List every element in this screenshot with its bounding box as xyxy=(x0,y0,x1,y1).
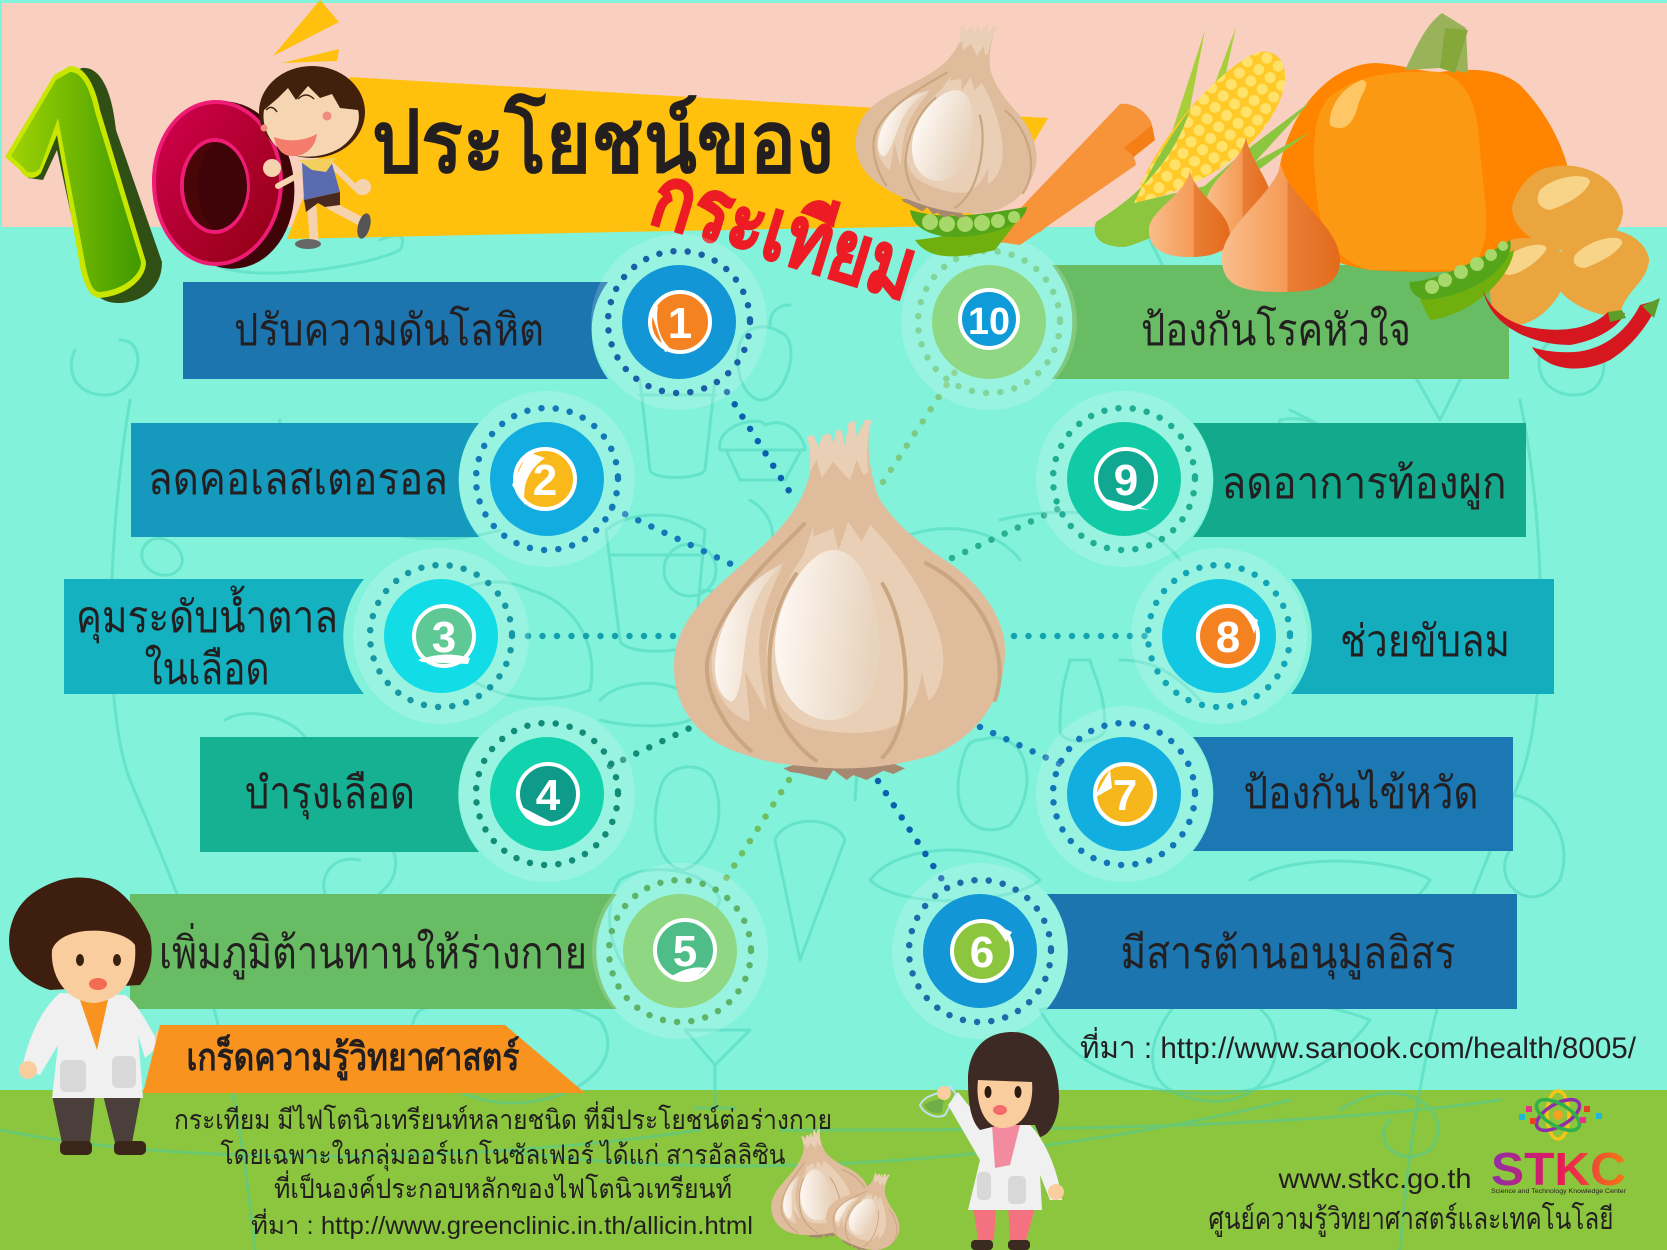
item 9 xyxy=(1036,391,1526,567)
female scientist xyxy=(920,1032,1064,1250)
item 5 xyxy=(130,863,768,1039)
website: www.stkc.go.th xyxy=(1277,1163,1472,1194)
banner: มีสารต้านอนุมูลอิสระ xyxy=(1047,894,1517,1009)
line 3: ที่เป็นองค์ประกอบหลักของไฟโตนิวเทรียนท์ xyxy=(274,1170,732,1204)
label: มีสารต้านอนุมูลอิสร xyxy=(1120,929,1456,980)
badge 9 xyxy=(1036,391,1212,567)
label: เพิ่มภูมิต้านทานให้ร่างกาย xyxy=(159,922,587,980)
male scientist xyxy=(9,877,175,1155)
label: ปรับความดันโลหิต xyxy=(234,305,544,355)
badge 4 xyxy=(459,706,635,882)
heading: เกร็ดความรู้วิทยาศาสตร์: เกร็ดความรู้วิทยาศาสตร์ xyxy=(186,1034,520,1081)
banner: ลดอาการท้องผูก xyxy=(1193,423,1526,537)
badge 10: 10 xyxy=(968,301,1010,343)
badge 7 xyxy=(1036,706,1212,882)
carrots xyxy=(985,104,1155,245)
label: บำรุงเลือด xyxy=(245,769,415,820)
badge 3 xyxy=(353,548,529,724)
central garlic xyxy=(674,420,1005,780)
item 8 xyxy=(1131,548,1554,724)
pumpkin xyxy=(1277,13,1571,272)
label line 2: ในเลือด xyxy=(144,644,270,694)
badge 3: 3 xyxy=(432,613,456,662)
small garlic pair xyxy=(761,1124,918,1250)
badge 6 xyxy=(892,863,1068,1039)
body text xyxy=(174,1101,832,1204)
banner: ลดคอเลสเตอรอล xyxy=(131,423,479,537)
item 6 xyxy=(892,863,1517,1039)
item 10 xyxy=(901,234,1509,410)
source: sanook: ที่มา : http://www.sanook.com/health/8005/ xyxy=(1080,1027,1637,1065)
corn xyxy=(1095,27,1310,247)
label: คุมระดับน้ำตาล xyxy=(76,585,338,644)
cartoon boy xyxy=(259,66,373,249)
potatoes xyxy=(1490,166,1649,325)
item 3 xyxy=(64,548,529,724)
source: greenclinic: ที่มา : http://www.greenclinic.in.th/allicin.html xyxy=(251,1208,753,1240)
heading: ประโยชน์ของ: ประโยชน์ของ xyxy=(372,92,834,191)
badge 6: 6 xyxy=(970,928,994,977)
label: ลดอาการท้องผูก xyxy=(1222,459,1506,510)
label: ป้องกันไข้หวัด xyxy=(1244,768,1478,818)
tagline: Science and Technology Knowledge Center xyxy=(1491,1189,1626,1195)
badge 7: 7 xyxy=(1113,771,1137,820)
item 2 xyxy=(131,391,635,567)
badge 10 xyxy=(901,234,1077,410)
wordmark: STKC xyxy=(1491,1143,1626,1195)
food doodle pattern xyxy=(0,236,1604,1250)
banner: คุมระดับน้ำตาล ในเลือด xyxy=(64,579,364,694)
banner: ช่วยขับลม xyxy=(1291,579,1554,694)
background: green footer xyxy=(0,1090,1667,1250)
line 1: กระเทียม มีไฟโตนิวเทรียนท์หลายชนิด ที่มีประโยชน์ต่อร่างกาย xyxy=(174,1101,832,1135)
badge 8 xyxy=(1131,548,1307,724)
orange label ribbon xyxy=(143,1025,585,1093)
item 4 xyxy=(200,706,635,882)
banner: ป้องกันไข้หวัด xyxy=(1193,737,1513,851)
background: peach header xyxy=(2,3,1667,227)
badge 2: 2 xyxy=(533,456,557,505)
top garlic bulb xyxy=(841,0,1068,237)
badge 4: 4 xyxy=(536,771,561,820)
pea pod right xyxy=(1410,240,1514,320)
pea pod left xyxy=(910,207,1027,256)
badge 9: 9 xyxy=(1114,456,1138,505)
number 10 xyxy=(5,66,305,303)
item 1 xyxy=(183,234,767,410)
badge 1: 1 xyxy=(668,299,692,348)
banner: ป้องกันโรคหัวใจ xyxy=(1052,265,1509,379)
badge 2 xyxy=(459,391,635,567)
heading: กระเทียม: กระเทียม xyxy=(641,148,928,319)
vegetables group xyxy=(841,0,1660,369)
badge 5 xyxy=(592,863,768,1039)
line 2: โดยเฉพาะในกลุ่มออร์แกโนซัลเฟอร์ ได้แก่ สารอัลลิซิน xyxy=(220,1139,786,1172)
digit 1 xyxy=(5,66,162,303)
badge 5: 5 xyxy=(673,927,697,976)
title ribbon xyxy=(287,77,1048,239)
lightning accents xyxy=(273,0,339,63)
digit 0 xyxy=(151,93,305,277)
atom icon xyxy=(1519,1091,1602,1139)
STKC logo xyxy=(1491,1091,1626,1195)
label: ลดคอเลสเตอรอล xyxy=(148,455,448,504)
item 7 xyxy=(1036,706,1513,882)
onions xyxy=(1149,138,1340,292)
label: ช่วยขับลม xyxy=(1340,617,1510,666)
dotted connectors xyxy=(528,372,1150,884)
banner: เพิ่มภูมิต้านทานให้ร่างกาย xyxy=(130,894,617,1009)
badge 8: 8 xyxy=(1216,613,1240,662)
chilli peppers xyxy=(1483,290,1660,369)
label: ป้องกันโรคหัวใจ xyxy=(1141,305,1411,355)
banner: ปรับความดันโลหิต xyxy=(183,282,608,379)
badge 1 xyxy=(591,234,767,410)
banner: บำรุงเลือด xyxy=(200,737,479,852)
